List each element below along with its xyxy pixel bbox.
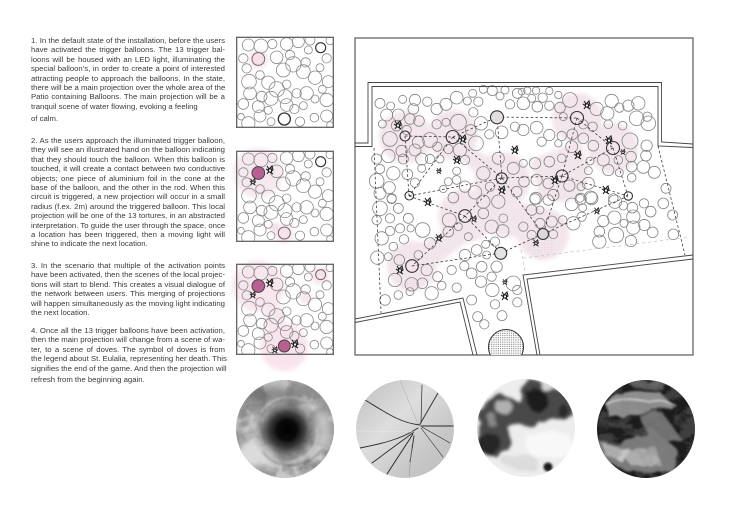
main site plan xyxy=(355,38,693,364)
small plan 3: several projections blending xyxy=(232,260,334,371)
image: smoke on black xyxy=(597,380,695,478)
paragraph 4: the legend about St. Eulalia, representing her death. This xyxy=(31,354,227,363)
building walls xyxy=(355,82,693,355)
paragraph 2: touched, it will create a contact between two conductive xyxy=(31,164,225,173)
thirteen trigger balloons xyxy=(400,111,632,272)
paragraph 2: circuit is triggered, a new projection will occur in a small xyxy=(31,192,225,201)
paragraph 2: objects; one piece of aluminium foil in the cone at the xyxy=(31,174,225,183)
paragraph 3: 3. In the scenario that multiple of the activation points xyxy=(31,261,225,270)
balloon field xyxy=(369,85,679,329)
paragraph 2: interpretation. To guide the user through the space, once xyxy=(31,221,225,230)
pink local projection zones xyxy=(379,93,638,292)
paragraph 2: that they should touch the balloon. When this balloon is xyxy=(31,155,225,164)
paragraph 2: projection will be one of the 13 tortures, in an abstracted xyxy=(31,211,225,220)
paragraph 3: have been activated, then the scenes of the local projec- xyxy=(31,270,225,279)
paragraph 3: will happen simultaneously as the moving light indicating xyxy=(31,299,225,308)
crack lines xyxy=(356,380,453,476)
pink glow behind illuminated balloon xyxy=(250,50,268,68)
paragraph 2: base of the balloon, and the other in the rod. When this xyxy=(31,183,225,192)
small plan 2: first balloon touched xyxy=(233,148,334,244)
paragraph 2: radius (f.ex. 2m) around the triggered balloon. This local xyxy=(31,202,225,211)
paragraph 4: then the main projection will change from a scene of wa- xyxy=(31,335,225,344)
paragraph 4: ter, to a scene of doves. The symbol of doves is from xyxy=(31,345,225,354)
paragraph 1: have activated the trigger balloons. The 13 trigger bal- xyxy=(31,45,225,54)
paragraph 1: there will be a main projection over the whole area of the xyxy=(31,83,225,92)
pink projection around triggered balloon xyxy=(233,148,283,198)
paragraph 3: tions will start to blend. This creates a visual dialogue of xyxy=(31,280,225,289)
paragraph 3 xyxy=(31,261,226,317)
paragraph 2: shine to indicate the next location. xyxy=(31,239,148,248)
image: ink in water xyxy=(475,379,575,477)
paragraph 4: refresh from the beginning again. xyxy=(31,375,145,384)
paragraph 2: 2. As the users approach the illuminated trigger balloon, xyxy=(31,136,225,145)
image: dark water vortex xyxy=(235,380,334,478)
dotted circular fountain xyxy=(488,329,524,355)
paragraph 2 xyxy=(31,136,225,248)
pale site boundary dashes xyxy=(521,237,690,272)
paragraph 1: loons will be housed with an LED light, illuminating the xyxy=(31,55,225,64)
paragraph 4: signifies the end of the game. And then the projection will xyxy=(31,364,227,373)
paragraph 4 xyxy=(31,326,227,384)
paragraph 1: Patio containing Balloons. The main projection will be a xyxy=(31,92,225,101)
hand icons beside balloons xyxy=(250,279,298,353)
paragraph 2: they will see an illustrated hand on the balloon indicating xyxy=(31,145,225,154)
paragraph 2: a location has been triggered, then a moving light will xyxy=(31,230,225,239)
hand icons beside balloon xyxy=(250,166,273,185)
plan frame xyxy=(355,38,693,355)
pink projection overlaps xyxy=(232,260,329,371)
paragraph 4: 4. Once all the 13 trigger balloons have been activation, xyxy=(31,326,225,335)
image: cracked glass xyxy=(356,380,454,478)
paragraph 1 xyxy=(31,36,225,123)
paragraph 3: the next location. xyxy=(31,308,90,317)
full graphic: plans and texture circles xyxy=(231,36,695,478)
paragraph 1: 1. In the default state of the installation, before the users xyxy=(31,36,225,45)
small plan 1: default state xyxy=(237,35,334,130)
dashed network between trigger balloons xyxy=(374,117,685,313)
paragraph 1: of calm. xyxy=(31,114,58,123)
paragraph 1: special balloon's, in order to create a point of interested xyxy=(31,64,225,73)
paragraph 1: attracting people to approach the balloons. In the state, xyxy=(31,74,225,83)
paragraph 1: tranquil scene of water flowing, evoking a feeling xyxy=(31,102,198,111)
paragraph 3: the network between users. This merging of projections xyxy=(31,289,225,298)
visitor figures xyxy=(394,101,625,300)
